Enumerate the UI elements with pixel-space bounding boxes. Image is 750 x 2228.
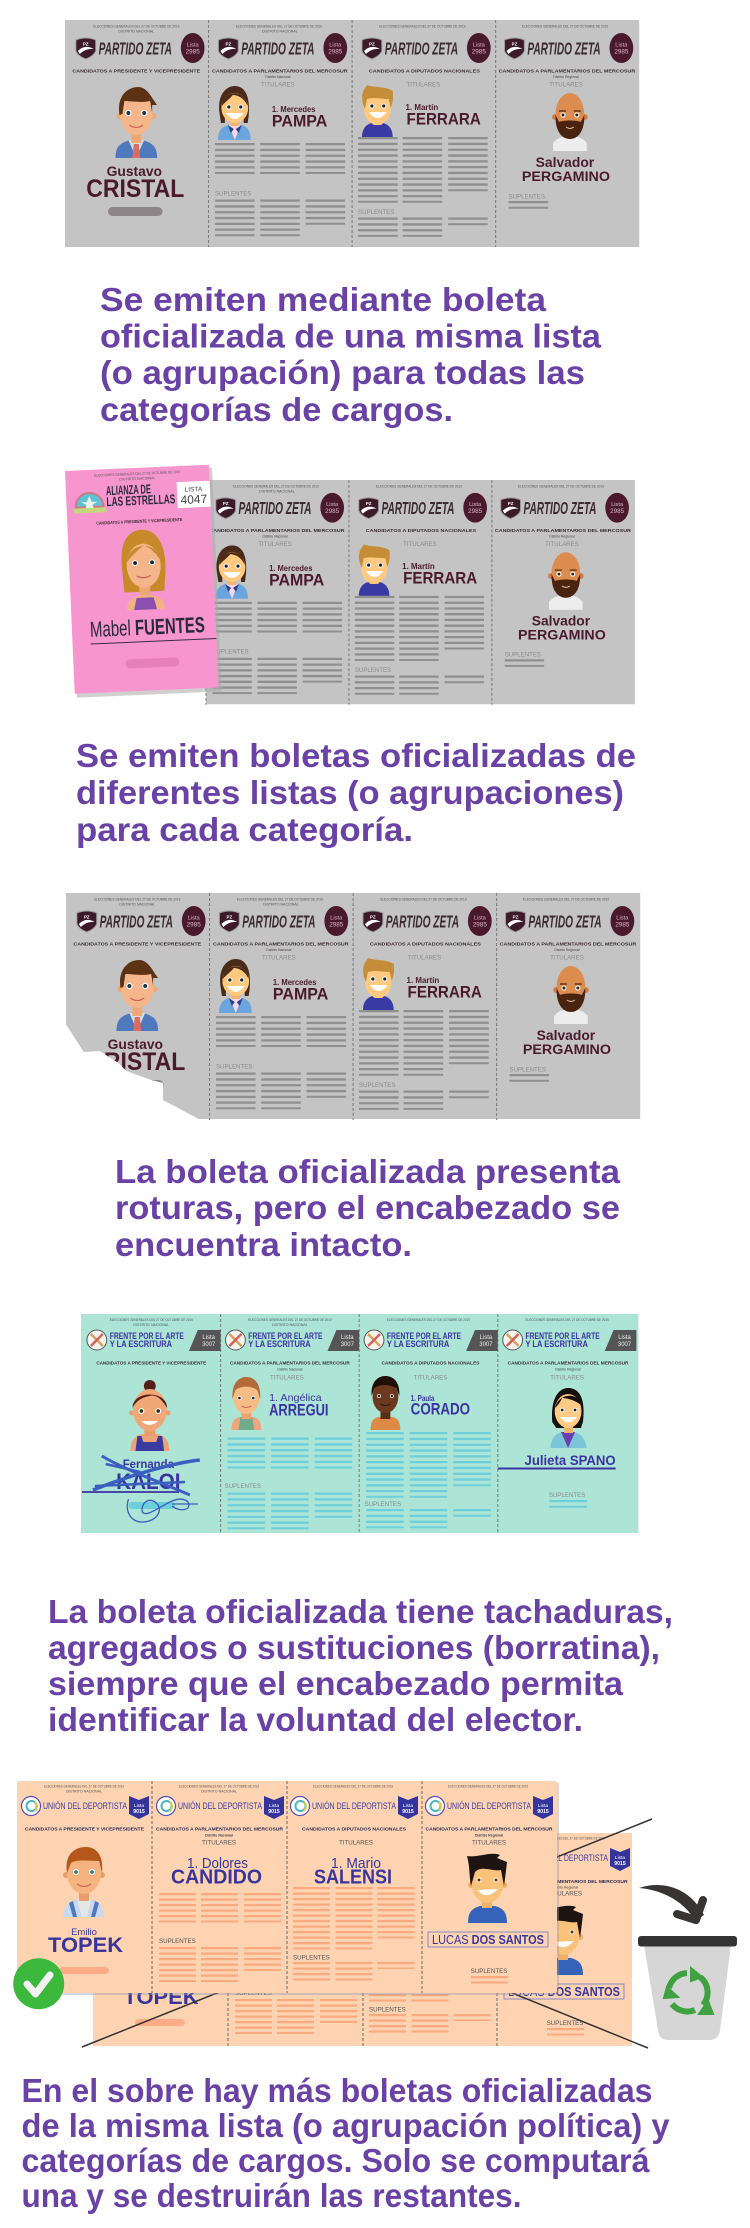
ballot headers — [76, 24, 633, 63]
ballot: Partido Zeta, complete — [65, 20, 639, 247]
column: parlamentarios mercosur nacional — [156, 1790, 283, 1945]
column: diputados nacionales: CANDIDATOS A DIPUTADOS NACIONALES — [366, 528, 477, 534]
candidate list lines — [246, 1432, 568, 1529]
ballot: Partido Zeta, three categories — [206, 480, 635, 705]
column: parlamentarios mercosur regional: SUPLENTES — [471, 1968, 507, 1975]
caption 4: siempre que el encabezado permita — [48, 1665, 624, 1702]
column: parlamentarios mercosur regional: CANDIDATOS A PARLAMENTARIOS DEL MERCOSUR — [495, 528, 631, 534]
column: diputados nacionales — [293, 1826, 407, 1962]
column: parlamentarios mercosur nacional: TITULARES — [270, 1374, 304, 1382]
column: presidente — [73, 902, 202, 1089]
caption 5: En el sobre hay más boletas oficializadas — [22, 2072, 652, 2109]
candidate portrait: Mabel — [120, 529, 167, 611]
column: parlamentarios mercosur nacional — [212, 29, 348, 198]
column: presidente: DISTRITO NACIONAL — [118, 29, 154, 34]
coalition logo — [73, 492, 106, 514]
column: diputados nacionales: TITULARES — [414, 1374, 447, 1382]
column: diputados nacionales: 1. Martín — [402, 562, 435, 571]
column: diputados nacionales: SUPLENTES — [355, 667, 391, 674]
column: parlamentarios mercosur nacional: 1. Angélica — [269, 1393, 322, 1404]
caption 1: Se emiten mediante boleta — [100, 281, 547, 318]
column: parlamentarios mercosur nacional: DISTRITO NACIONAL — [259, 489, 295, 493]
column: presidente — [82, 1323, 207, 1522]
column: parlamentarios mercosur regional: Distrito Regional — [549, 534, 575, 538]
column: diputados nacionales: CANDIDATOS A DIPUTADOS NACIONALES — [302, 1826, 407, 1832]
caption 1 — [100, 281, 602, 428]
column: diputados nacionales: FERRARA — [407, 109, 481, 129]
column: diputados nacionales: TITULARES — [403, 541, 437, 548]
column: parlamentarios mercosur nacional: DISTRITO NACIONAL — [262, 29, 298, 34]
icon: green check — [13, 1958, 64, 2009]
ballot: pink Alianza de las Estrellas, presidente — [65, 465, 222, 698]
column: presidente: CRISTAL — [87, 1048, 185, 1076]
column: parlamentarios mercosur nacional: PAMPA — [273, 984, 328, 1004]
column: parlamentarios mercosur regional: PERGAMINO — [518, 626, 606, 642]
column: diputados nacionales — [359, 941, 482, 1089]
column: diputados nacionales: TITULARES — [339, 1840, 373, 1846]
ballot headers — [87, 1318, 636, 1351]
coalition name: ALIANZA DE — [106, 481, 151, 498]
ballot headers — [216, 484, 629, 523]
scribbled crossing — [93, 1456, 200, 1495]
column: diputados nacionales: CANDIDATOS A DIPUTADOS NACIONALES — [381, 1360, 480, 1367]
candidate list lines — [235, 137, 528, 237]
column: diputados nacionales: SUPLENTES — [358, 209, 394, 216]
column: parlamentarios mercosur regional — [495, 528, 631, 659]
recycle arrows — [664, 1968, 713, 2014]
column: parlamentarios mercosur regional — [498, 1360, 629, 1499]
column: parlamentarios mercosur nacional: Distrito Nacional — [265, 75, 291, 79]
caption 4: identificar la voluntad del elector. — [48, 1701, 583, 1738]
column: diputados nacionales — [365, 1360, 480, 1508]
caption 3: roturas, pero el encabezado se — [115, 1189, 620, 1226]
column: parlamentarios mercosur regional: Distrito Regional — [553, 75, 579, 79]
column: presidente: DISTRITO NACIONAL — [66, 1790, 102, 1794]
column: presidente: Gustavo — [107, 163, 162, 179]
column: presidente: DISTRITO NACIONAL — [133, 1323, 169, 1327]
column: parlamentarios mercosur regional: CANDIDATOS A PARLAMENTARIOS DEL MERCOSUR — [500, 941, 637, 948]
column: parlamentarios mercosur nacional: SUPLENTES — [159, 1938, 196, 1945]
column: parlamentarios mercosur nacional: TITULARES — [202, 1840, 236, 1846]
column: parlamentarios mercosur regional: Distrito Regional — [554, 948, 580, 952]
column: parlamentarios mercosur regional — [499, 68, 636, 201]
column: diputados nacionales: 1. Martín — [407, 976, 439, 985]
column: parlamentarios mercosur regional — [426, 1826, 553, 1975]
list number: 4047 — [180, 492, 208, 507]
column: parlamentarios mercosur regional: SUPLENTES — [510, 1066, 546, 1074]
column: parlamentarios mercosur regional: SUPLENTES — [509, 193, 545, 201]
caption 2: para cada categoría. — [76, 811, 413, 848]
column: presidente: DISTRITO NACIONAL — [119, 902, 155, 907]
column: diputados nacionales: FERRARA — [403, 568, 477, 587]
column: parlamentarios mercosur nacional — [213, 902, 349, 1071]
column: parlamentarios mercosur regional: TITULARES — [472, 1840, 506, 1846]
caption 2: Se emiten boletas oficializadas de — [76, 737, 636, 774]
back ballot: discarded duplicate — [93, 1833, 632, 2046]
ballot: pink Alianza de las Estrellas, presidente: CANDIDATOS A PRESIDENTE Y VICEPRESIDENTE — [96, 517, 182, 526]
caption 4: La boleta oficializada tiene tachaduras, — [48, 1593, 673, 1630]
back ballot: discarded duplicate: Distrito Regional — [552, 1886, 578, 1890]
column: parlamentarios mercosur nacional: Distrito Nacional — [262, 534, 288, 538]
column: parlamentarios mercosur nacional: Distrito Nacional — [277, 1367, 303, 1372]
column: diputados nacionales: TITULARES — [407, 81, 440, 89]
column: diputados nacionales — [355, 528, 477, 674]
caption 5: categorías de cargos. Solo se computará — [22, 2142, 650, 2179]
caption 5: de la misma lista (o agrupación política) y — [22, 2107, 670, 2144]
ballot: pink Alianza de las Estrellas, presidente: Mabel FUENTES — [89, 612, 205, 642]
column: parlamentarios mercosur nacional: DISTRITO NACIONAL — [263, 902, 299, 907]
column: presidente: KALOI — [116, 1469, 180, 1494]
column: parlamentarios mercosur nacional: TITULARES — [258, 541, 292, 548]
column: parlamentarios mercosur nacional: DISTRITO NACIONAL — [201, 1790, 237, 1794]
column: presidente: Fernanda — [123, 1459, 175, 1471]
column: parlamentarios mercosur regional: PERGAMINO — [523, 1041, 611, 1057]
column: parlamentarios mercosur nacional: 1. Mercedes — [272, 105, 316, 114]
caption 2: diferentes listas (o agrupaciones) — [76, 774, 624, 811]
caption 3 — [115, 1153, 621, 1263]
column: parlamentarios mercosur nacional — [209, 489, 345, 656]
torn corner — [65, 1023, 201, 1120]
signature scribble — [127, 1499, 198, 1522]
portrait: Julieta — [550, 1388, 587, 1448]
column: diputados nacionales: CORADO — [411, 1399, 470, 1419]
portrait: Paula — [371, 1376, 400, 1430]
column: presidente: Gustavo — [108, 1036, 163, 1052]
column: diputados nacionales: CANDIDATOS A DIPUTADOS NACIONALES — [370, 941, 482, 948]
caption 2 — [76, 737, 636, 848]
column: parlamentarios mercosur regional: PERGAMINO — [522, 168, 610, 184]
column: presidente: CANDIDATOS A PRESIDENTE Y VICEPRESIDENTE — [72, 68, 201, 75]
caption 4 — [48, 1593, 673, 1738]
caption 1: categorías de cargos. — [100, 391, 453, 428]
column: parlamentarios mercosur nacional: CANDIDATOS A PARLAMENTARIOS DEL MERCOSUR — [209, 528, 345, 534]
column: parlamentarios mercosur regional: Distrito Regional — [475, 1834, 503, 1838]
column: parlamentarios mercosur regional: CANDIDATOS A PARLAMENTARIOS DEL MERCOSUR — [499, 68, 636, 75]
column: diputados nacionales: SUPLENTES — [293, 1954, 330, 1962]
coalition name — [106, 480, 176, 509]
column: parlamentarios mercosur regional: SUPLENTES — [505, 652, 541, 659]
column: parlamentarios mercosur nacional: DISTRITO NACIONAL — [272, 1323, 308, 1327]
column: parlamentarios mercosur nacional: Distrito Nacional — [205, 1834, 233, 1838]
caption 1: oficializada de una misma lista — [100, 318, 602, 354]
column: presidente: CRISTAL — [86, 175, 184, 203]
name: back Lucas dos Santos: LUCAS DOS SANTOS — [508, 1984, 620, 1999]
candidate list lines — [232, 596, 524, 695]
back ballot: discarded duplicate: SUPLENTES — [547, 2020, 583, 2027]
column: parlamentarios mercosur regional: TITULARES — [550, 1374, 584, 1382]
column: presidente: CANDIDATOS A PRESIDENTE Y VICEPRESIDENTE — [25, 1826, 145, 1832]
column: parlamentarios mercosur nacional: SUPLENTES — [215, 190, 251, 198]
column: parlamentarios mercosur regional — [500, 941, 637, 1074]
ballot headers — [77, 897, 634, 936]
list number: LISTA — [185, 486, 203, 494]
column: diputados nacionales: TITULARES — [408, 954, 441, 962]
column: parlamentarios mercosur nacional: SUPLENTES — [216, 1063, 252, 1071]
ballot: Partido Zeta, torn — [65, 893, 640, 1120]
column: parlamentarios mercosur nacional: PAMPA — [272, 111, 327, 131]
ballot headers — [22, 1784, 553, 1819]
column: parlamentarios mercosur nacional: SUPLENTES — [225, 1483, 261, 1490]
column: parlamentarios mercosur regional: TITULARES — [550, 954, 584, 962]
column: diputados nacionales: 1. Martín — [406, 103, 438, 112]
column: parlamentarios mercosur nacional: TITULARES — [261, 81, 295, 89]
back ballot: discarded duplicate: CANDIDATOS A PARLAMENTARIOS DEL MERCOSUR — [502, 1879, 628, 1885]
column: presidente — [72, 29, 201, 216]
column: parlamentarios mercosur regional: Salvador — [537, 1027, 596, 1043]
column: presidente: CANDIDATOS A PRESIDENTE Y VICEPRESIDENTE — [73, 941, 202, 948]
column: diputados nacionales: FERRARA — [408, 982, 482, 1002]
column: parlamentarios mercosur regional: Salvador — [532, 613, 591, 629]
icon: recycle bin — [638, 1936, 737, 2040]
column: parlamentarios mercosur regional: SUPLENTES — [549, 1492, 585, 1499]
column: parlamentarios mercosur nacional: 1. Mercedes — [273, 978, 317, 987]
column: parlamentarios mercosur regional: TITULARES — [549, 81, 583, 89]
icon: arrow into bin — [639, 1885, 704, 1921]
column: parlamentarios mercosur nacional — [225, 1323, 350, 1490]
column: parlamentarios mercosur regional: CANDIDATOS A PARLAMENTARIOS DEL MERCOSUR — [508, 1360, 629, 1367]
column: diputados nacionales: SUPLENTES — [359, 1082, 395, 1089]
column: parlamentarios mercosur nacional: CANDIDATOS A PARLAMENTARIOS DEL MERCOSUR — [230, 1360, 350, 1367]
column: parlamentarios mercosur nacional: SUPLENTES — [212, 649, 249, 656]
column: parlamentarios mercosur regional: CANDIDATOS A PARLAMENTARIOS DEL MERCOSUR — [426, 1826, 553, 1832]
back ballot: discarded duplicate: TITULARES — [548, 1890, 582, 1898]
column: parlamentarios mercosur nacional: Distrito Nacional — [266, 948, 292, 952]
candidate list lines — [236, 1010, 529, 1110]
column: parlamentarios mercosur nacional: 1. Mercedes — [269, 564, 313, 573]
ballot: pink Alianza de las Estrellas, presidente: ELECCIONES GENERALES DEL 27 DE OCTUBRE DE 2019 — [94, 470, 180, 478]
column: parlamentarios mercosur nacional: 1. Dolores — [187, 1855, 248, 1872]
list number — [177, 481, 211, 508]
caption 1: (o agrupación) para todas las — [100, 354, 585, 391]
column: parlamentarios mercosur nacional: TITULARES — [262, 954, 296, 962]
column: parlamentarios mercosur regional: TITULARES — [545, 541, 579, 548]
caption 5 — [22, 2072, 670, 2214]
column: parlamentarios mercosur nacional: CANDIDO — [171, 1866, 262, 1888]
column: parlamentarios mercosur regional: Salvador — [536, 154, 595, 170]
column: parlamentarios mercosur nacional: CANDIDATOS A PARLAMENTARIOS DEL MERCOSUR — [212, 68, 348, 75]
caption 5: una y se destruirán las restantes. — [22, 2177, 522, 2214]
column: diputados nacionales: 1. Paula — [411, 1394, 435, 1403]
column: parlamentarios mercosur regional: Distrito Regional — [555, 1367, 581, 1372]
column: parlamentarios mercosur regional: LUCAS DOS SANTOS — [432, 1932, 544, 1947]
column: diputados nacionales — [358, 68, 481, 216]
caption 4: agregados o sustituciones (borratina), — [48, 1629, 660, 1666]
column: diputados nacionales: 1. Mario — [331, 1855, 381, 1872]
column: parlamentarios mercosur nacional: PAMPA — [269, 570, 324, 589]
coalition name: LAS ESTRELLAS — [106, 491, 176, 509]
back ballot: discarded duplicate: SUPLENTES — [235, 1990, 272, 1997]
column: diputados nacionales: CANDIDATOS A DIPUTADOS NACIONALES — [369, 68, 481, 75]
column: parlamentarios mercosur nacional: CANDIDATOS A PARLAMENTARIOS DEL MERCOSUR — [213, 941, 349, 948]
column: parlamentarios mercosur regional: Julieta SPANO — [525, 1452, 616, 1468]
column: diputados nacionales: SALENSI — [314, 1866, 392, 1888]
column: presidente — [25, 1790, 145, 1974]
column: parlamentarios mercosur nacional: ARREGUI — [269, 1400, 328, 1420]
column: diputados nacionales: SUPLENTES — [365, 1501, 401, 1508]
ballot: pink Alianza de las Estrellas, presidente: DISTRITO NACIONAL — [119, 476, 156, 482]
column: presidente: Emilio — [71, 1927, 97, 1938]
portrait: Angelica — [231, 1377, 261, 1430]
candidate list lines — [178, 1887, 490, 1984]
ballot: Frente por el Arte, with scribbles — [81, 1314, 638, 1533]
portrait: Fernanda — [129, 1380, 171, 1451]
caption 3: La boleta oficializada presenta — [115, 1153, 621, 1190]
column: presidente: TOPEK — [48, 1934, 123, 1957]
cross-out lines over back ballot — [82, 1819, 652, 2048]
column: presidente: CANDIDATOS A PRESIDENTE Y VICEPRESIDENTE — [96, 1360, 207, 1367]
column: parlamentarios mercosur nacional: CANDIDATOS A PARLAMENTARIOS DEL MERCOSUR — [156, 1826, 283, 1832]
back ballot: discarded duplicate: SUPLENTES — [369, 2006, 406, 2014]
front ballot: Union del Deportista — [17, 1781, 559, 1995]
back ballot: discarded duplicate: TOPEK — [124, 1986, 198, 2009]
caption 3: encuentra intacto. — [115, 1226, 412, 1263]
